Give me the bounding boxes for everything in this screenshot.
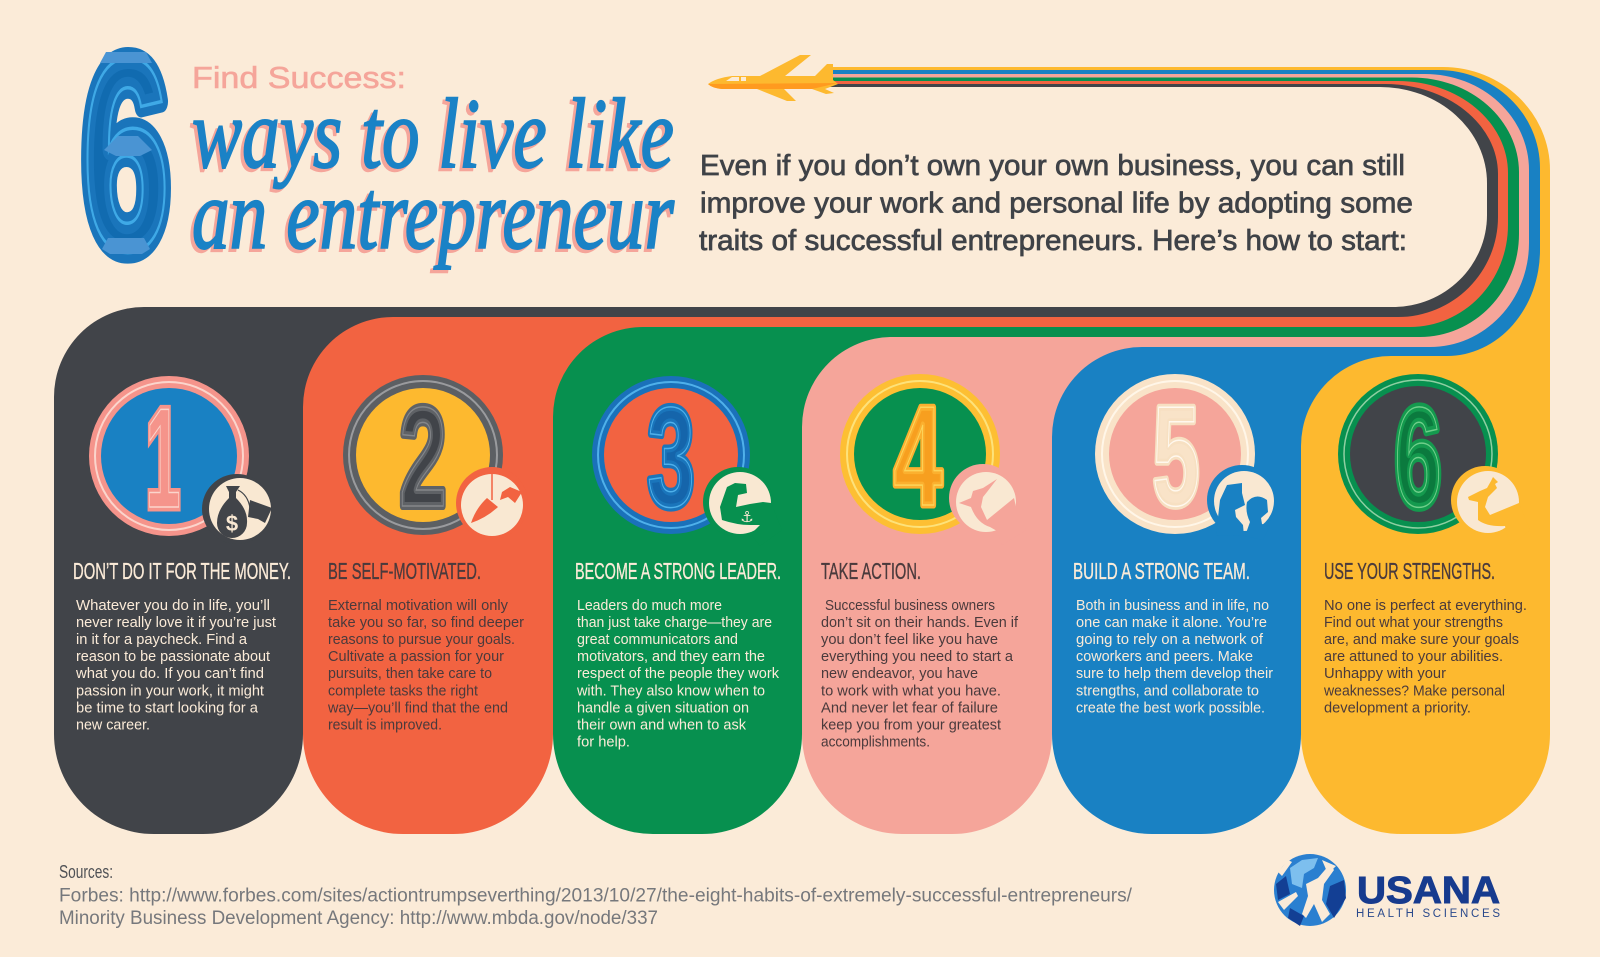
body text 3: respect of the people they work <box>577 666 780 682</box>
intro text: traits of successful entrepreneurs. Here’s how to start: <box>699 225 1407 257</box>
body text 3: their own and when to ask <box>577 718 747 734</box>
number ring 4: 4 <box>894 378 943 536</box>
icon: arm with hammer <box>1451 466 1530 546</box>
heading 4: TAKE ACTION. <box>821 558 921 584</box>
number ring 5: 5 <box>1152 376 1200 535</box>
title: script heading: ways to live like <box>192 78 674 189</box>
body text 3: for help. <box>577 734 630 750</box>
icon: flexed arm with anchor: ⚓ <box>740 508 754 526</box>
sources: Minority Business Development Agency: http://www.mbda.gov/node/337 <box>59 908 658 929</box>
body text 4 <box>821 598 1019 750</box>
icon: flexed arm with anchor <box>703 467 782 546</box>
icon: two people in profile <box>1207 465 1277 540</box>
body text 3: motivators, and they earn the <box>577 649 765 665</box>
icon: airplane <box>708 55 838 101</box>
number ring 3: 3 <box>647 377 695 536</box>
intro text: Even if you don’t own your own business, you can still <box>700 150 1405 182</box>
icon: money bag: $ <box>226 511 238 536</box>
panel 2: red <box>303 317 648 834</box>
panel 5: blue <box>1052 347 1396 834</box>
body text 3: handle a given situation on <box>577 700 749 716</box>
panel 1: dark <box>54 307 398 834</box>
body text 2: result is improved. <box>328 718 442 734</box>
body text 1: in it for a paycheck. Find a <box>76 632 248 648</box>
body text 4: Successful business owners <box>825 598 995 614</box>
title: script heading <box>189 78 675 273</box>
sources <box>59 862 1133 929</box>
body text 2: pursuits, then take care to <box>328 666 492 682</box>
sources: Sources: <box>59 862 113 882</box>
body text 4: And never let fear of failure <box>821 700 998 716</box>
big numeral 6: 6 <box>82 2 170 309</box>
body text 5: strengths, and collaborate to <box>1076 684 1259 700</box>
body text 2: reasons to pursue your goals. <box>328 632 515 648</box>
body text 1: never really love it if you’re just <box>76 615 276 631</box>
heading 3: BECOME A STRONG LEADER. <box>575 558 781 584</box>
body text 6: weaknesses? Make personal <box>1323 684 1505 700</box>
body text 1: what you do. If you can’t find <box>75 666 264 682</box>
body text 3: Leaders do much more <box>577 598 722 614</box>
body text 6: are, and make sure your goals <box>1324 632 1519 648</box>
body text 5: Both in business and in life, no <box>1076 598 1269 614</box>
number ring 1 <box>89 376 249 538</box>
body text 5: create the best work possible. <box>1076 700 1265 716</box>
heading 2: BE SELF-MOTIVATED. <box>328 558 481 584</box>
number ring 5 <box>1095 374 1255 535</box>
body text 4: everything you need to start a <box>821 649 1014 665</box>
heading 1: DON’T DO IT FOR THE MONEY. <box>73 558 291 584</box>
number ring 3 <box>592 376 750 536</box>
body text 2: complete tasks the right <box>328 684 478 700</box>
logo wordmark: USANA <box>1357 870 1500 912</box>
body text 5 <box>1076 598 1273 716</box>
body text 1: be time to start looking for a <box>76 700 259 716</box>
number ring 3: 3 <box>647 377 695 536</box>
body text 3: with. They also know when to <box>576 684 765 700</box>
body text 6: Unhappy with your <box>1324 666 1446 682</box>
number ring 6: 6 <box>1394 377 1442 536</box>
body text 2 <box>327 598 524 734</box>
icon: carrot on a stick <box>456 467 528 539</box>
title: script heading: ways to live like <box>189 81 671 192</box>
logo tagline: HEALTH SCIENCES <box>1356 908 1500 920</box>
body text 4: accomplishments. <box>821 734 930 750</box>
body text 4: to work with what you have. <box>821 684 1001 700</box>
number ring 1: 1 <box>146 380 180 538</box>
panel 4: pink <box>802 337 1147 834</box>
number ring 2: 2 <box>399 377 447 536</box>
number ring 2 <box>343 375 503 536</box>
subtitle: Find Success: Find Success: <box>192 60 406 95</box>
icon: arm with lightning bolt <box>949 464 1026 545</box>
body text 1: passion in your work, it might <box>76 684 264 700</box>
body text 1: reason to be passionate about <box>76 649 270 665</box>
body text 2: way—you’ll find that the end <box>327 700 508 716</box>
body text 6 <box>1323 598 1527 716</box>
intro text: improve your work and personal life by adopting some <box>700 188 1413 220</box>
logo: USANA Health Sciences <box>1274 854 1500 926</box>
panel 3: green <box>553 327 897 834</box>
body text 5: one can make it alone. You’re <box>1076 615 1267 631</box>
body text 4: keep you from your greatest <box>821 718 1001 734</box>
number ring 5: 5 <box>1152 376 1200 535</box>
body text 4: new endeavor, you have <box>821 666 978 682</box>
body text 3: than just take charge—they are <box>577 615 772 631</box>
body text 4: don’t sit on their hands. Even if <box>821 615 1019 631</box>
body text 2: take you so far, so find deeper <box>328 615 524 631</box>
body text 5: sure to help them develop their <box>1076 666 1273 682</box>
body text 2: Cultivate a passion for your <box>328 649 504 665</box>
icon: money bag <box>202 474 272 544</box>
body text 5: going to rely on a network of <box>1076 632 1264 648</box>
number ring 4: 4 <box>894 378 943 536</box>
body text 6: No one is perfect at everything. <box>1324 598 1527 614</box>
body text 6: are attuned to your abilities. <box>1324 649 1503 665</box>
body text 1: new career. <box>76 718 150 734</box>
rainbow ribbon trail <box>0 67 1550 420</box>
number ring 6 <box>1338 374 1498 536</box>
number ring 4 <box>840 374 1000 536</box>
body text 2: External motivation will only <box>328 598 509 614</box>
body text 1 <box>75 598 276 734</box>
panel 6: yellow <box>1301 356 1550 834</box>
sources: Forbes: http://www.forbes.com/sites/actiontrumpseverthing/2013/10/27/the-eight-habits-of-extremely-successful-entrepreneurs/ <box>59 886 1133 906</box>
heading 6: USE YOUR STRENGTHS. <box>1324 558 1495 584</box>
title: script heading: an entrepreneur <box>192 159 675 270</box>
logo globe <box>1274 854 1346 926</box>
number ring 6: 6 <box>1394 377 1442 536</box>
body text 3: great communicators and <box>577 632 738 648</box>
title: script heading: an entrepreneur <box>189 162 672 273</box>
intro text <box>699 150 1413 257</box>
big numeral 6: 6 <box>82 2 170 309</box>
heading 5: BUILD A STRONG TEAM. <box>1073 558 1250 584</box>
number ring 1: 1 <box>146 380 180 538</box>
body text 4: you don’t feel like you have <box>821 632 998 648</box>
body text 1: Whatever you do in life, you’ll <box>76 598 270 614</box>
body text 6: Find out what your strengths <box>1324 615 1503 631</box>
body text 6: development a priority. <box>1324 700 1471 716</box>
number ring 2: 2 <box>399 377 447 536</box>
body text 5: coworkers and peers. Make <box>1076 649 1253 665</box>
body text 3 <box>576 598 780 750</box>
